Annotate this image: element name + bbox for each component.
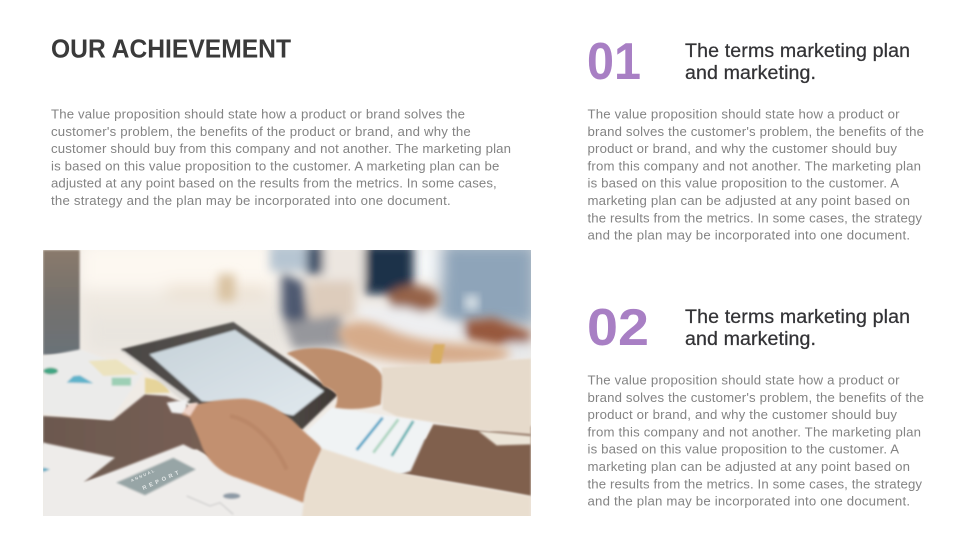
photo: hands holding a tablet over reports [43,250,531,516]
intro paragraph: the strategy and the plan may be incorporated into one document. [51,193,451,208]
intro paragraph: The value proposition should state how a product or brand solves the [51,106,465,122]
paragraph 02: marketing plan can be adjusted at any point based on [588,459,910,474]
title: OUR ACHIEVEMENT [51,36,291,64]
paragraph 01: the results from the metrics. In some cases, the strategy [588,210,922,225]
laptop [43,250,80,355]
intro paragraph: adjusted at any point based on the results from the metrics. In some cases, [51,176,497,191]
intro paragraph: customer's problem, the benefits of the product or brand, and why the [51,124,471,139]
paragraph 01: brand solves the customer's problem, the benefits of the [588,124,924,139]
heading 01 [685,40,910,84]
paragraph 02: from this company and not another. The marketing plan [588,424,921,439]
paragraph 01: marketing plan can be adjusted at any point based on [588,193,910,208]
tablet [121,322,338,430]
paragraph 01: and the plan may be incorporated into one document. [588,228,910,243]
paragraph 01: is based on this value proposition to the customer. A [588,176,899,191]
paragraph 02: brand solves the customer's problem, the benefits of the [588,390,924,405]
intro paragraph: is based on this value proposition to the customer. A marketing plan can be [51,158,499,173]
soft foreground arm [337,295,510,364]
heading 01: The terms marketing plan [685,40,910,62]
number 01: 01 [587,33,641,91]
front hand [182,399,531,519]
paragraph 02: and the plan may be incorporated into one document. [588,494,910,509]
table [43,378,531,496]
paper with chart [303,408,433,476]
paragraph 02: product or brand, and why the customer should buy [588,407,897,422]
photo: hands holding a tablet over reports: ANNUAL [130,468,155,483]
paragraph 02 [588,372,924,509]
intro paragraph: customer should buy from this company and not another. The marketing plan [51,141,511,156]
heading 02: and marketing. [685,328,816,350]
heading 01: and marketing. [685,62,816,84]
heading 02: The terms marketing plan [685,306,910,328]
paragraph 02: The value proposition should state how a product or [588,372,900,388]
intro paragraph [51,106,511,208]
paragraph 01: The value proposition should state how a product or [588,106,900,122]
heading 02 [685,306,910,350]
bottom papers [43,442,242,515]
photo: hands holding a tablet over reports: REPORT [142,470,181,492]
paragraph 02: is based on this value proposition to the customer. A [588,442,899,457]
paper left [43,349,143,420]
paragraph 01 [588,106,924,243]
number 02: 02 [587,299,649,357]
paragraph 01: from this company and not another. The marketing plan [588,158,921,173]
paragraph 02: the results from the metrics. In some cases, the strategy [588,476,922,491]
paragraph 01: product or brand, and why the customer should buy [588,141,897,156]
back hand [287,348,531,445]
